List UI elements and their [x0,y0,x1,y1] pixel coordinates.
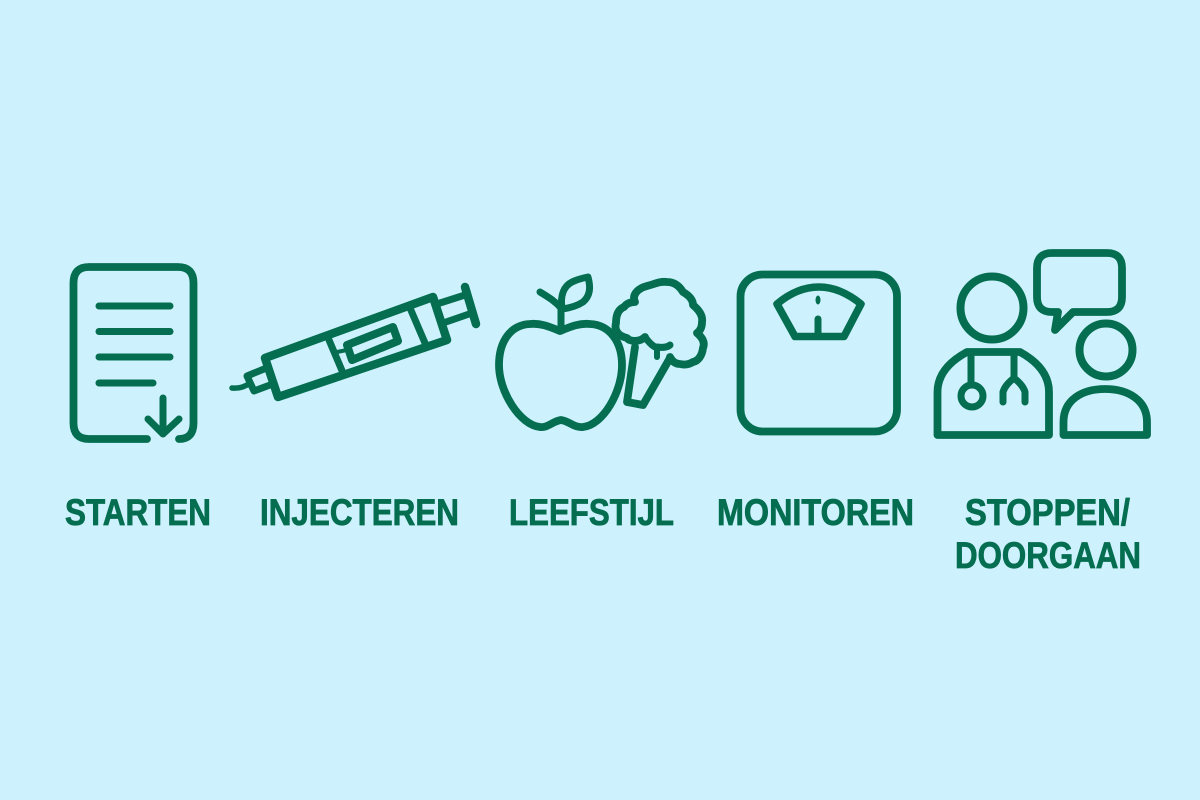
icon: document with download arrow [74,267,194,439]
label: leefstijl: LEEFSTIJL [509,492,674,533]
icon: doctor and patient conversation [938,253,1147,435]
label: monitoren: MONITOREN [717,492,914,533]
icon: bathroom scale [740,274,897,432]
icon: apple and broccoli [499,277,704,427]
label: injecteren: INJECTEREN [260,492,459,533]
label: stoppen/doorgaan: DOORGAAN [955,535,1141,576]
label: starten: STARTEN [65,492,211,533]
label: stoppen/doorgaan [955,492,1141,576]
icon: injection pen [232,287,476,397]
label: stoppen/doorgaan: STOPPEN/ [965,492,1130,533]
